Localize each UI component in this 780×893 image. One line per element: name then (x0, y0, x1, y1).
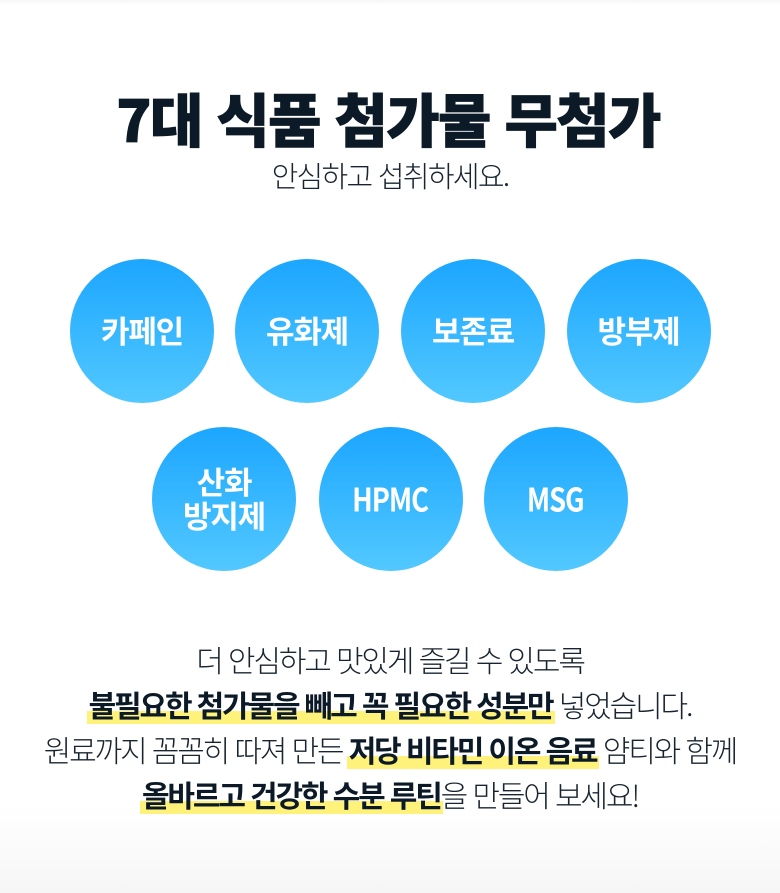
circle: MSG: MSG (527, 474, 584, 521)
circle: antiseptic (566, 259, 710, 403)
circle: antioxidant: 산화 (197, 458, 251, 503)
circle: antioxidant (152, 427, 296, 571)
title: 7대 식품 첨가물 무첨가 (116, 75, 660, 159)
circle: preservative (401, 259, 545, 403)
additive circles (70, 259, 711, 571)
subtitle: 안심하고 섭취하세요. (272, 154, 508, 196)
circle: caffeine: 카페인 (101, 307, 183, 352)
circle: antioxidant: 방지제 (183, 492, 265, 537)
circle: preservative: 보존료 (432, 307, 514, 352)
circle: emulsifier: 유화제 (266, 307, 348, 352)
circle: emulsifier (235, 259, 379, 403)
circle: antiseptic: 방부제 (598, 307, 679, 352)
circle: caffeine (70, 259, 214, 403)
circle: HPMC: HPMC (353, 474, 428, 521)
circle: HPMC (318, 427, 462, 571)
text line 2: 불필요한 첨가물을 빼고 꼭 필요한 성분만 넣었습니다. (89, 682, 691, 726)
circle: MSG (484, 427, 628, 571)
text line 3: 원료까지 꼼꼼히 따져 만든 저당 비타민 이온 음료 얌티와 함께 (44, 727, 736, 771)
text line 4: 올바르고 건강한 수분 루틴을 만들어 보세요! (142, 772, 638, 816)
closing text block (44, 637, 736, 816)
text line 1: 더 안심하고 맛있게 즐길 수 있도록 (196, 637, 584, 681)
